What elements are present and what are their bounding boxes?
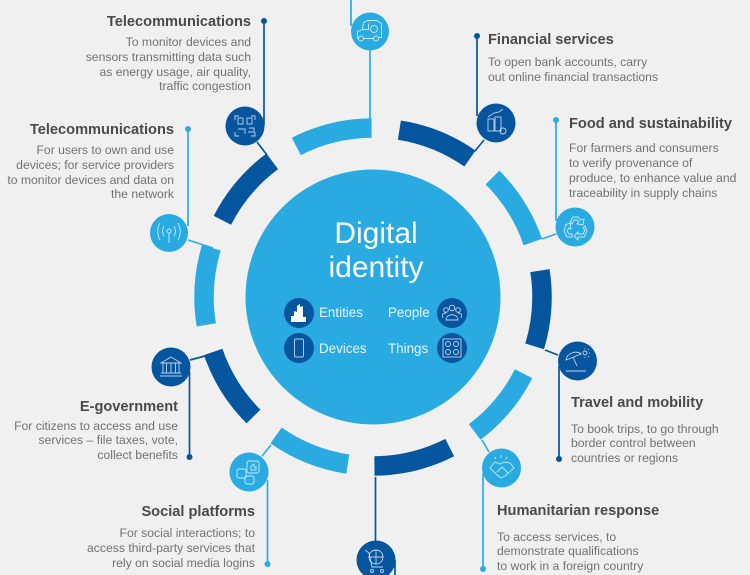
leader line xyxy=(262,445,271,564)
segmented ring xyxy=(204,128,542,466)
leader line xyxy=(376,477,395,575)
panel: financial services: out online financial transactions xyxy=(488,70,658,84)
heading: Telecommunications xyxy=(30,122,174,138)
panel: e-government: collect benefits xyxy=(97,448,178,462)
panel: travel and mobility xyxy=(545,342,719,465)
dot xyxy=(553,117,559,123)
panel: telecommunications devices xyxy=(86,14,267,155)
icon: government building xyxy=(152,348,190,386)
leader line xyxy=(475,36,484,151)
dot xyxy=(480,566,486,572)
panel: travel and mobility: countries or regions xyxy=(571,451,678,465)
icon: speech bubbles xyxy=(230,452,268,492)
heading: Telecommunications xyxy=(107,14,251,30)
panel: humanitarian response: demonstrate qualifications xyxy=(497,544,639,558)
label: things: Things xyxy=(388,341,428,356)
description: For citizens to access and use xyxy=(14,419,178,433)
panel: telecommunications users xyxy=(7,122,213,252)
panel: financial services xyxy=(474,32,658,151)
leader line xyxy=(257,21,267,155)
icon: people xyxy=(437,298,467,328)
panel: food and sustainability xyxy=(542,116,736,246)
dot xyxy=(185,126,191,132)
description: For farmers and consumers xyxy=(569,141,719,155)
icon: things xyxy=(437,333,467,363)
panel: e-government xyxy=(14,348,205,462)
panel: e-government: services – file taxes, vote, xyxy=(38,433,178,447)
heading: Financial services xyxy=(488,32,614,48)
dot xyxy=(264,561,270,567)
label: entities: Entities xyxy=(319,305,363,320)
description: To book trips, to go through xyxy=(571,422,719,436)
icon: ambulance xyxy=(351,12,389,50)
heading: E-government xyxy=(80,399,178,415)
icon: entities xyxy=(284,298,314,328)
description: To monitor devices and xyxy=(126,35,251,49)
leader line xyxy=(482,440,489,569)
leader line xyxy=(545,350,559,459)
icon: devices xyxy=(284,333,314,363)
icon: handshake xyxy=(482,448,521,488)
dot xyxy=(186,454,192,460)
label: people: People xyxy=(388,305,430,320)
icon: network grid xyxy=(226,106,264,146)
panel: humanitarian response: to work in a foreign country xyxy=(497,559,644,573)
central circle: digital identity xyxy=(246,170,500,424)
icon: antenna xyxy=(150,214,188,252)
icon: shopping cart xyxy=(356,540,396,575)
leader line xyxy=(542,120,556,239)
panel: social platforms: rely on social media logins xyxy=(112,556,255,570)
description: To access services, to xyxy=(497,530,616,544)
central circle: digital identity: identity xyxy=(328,251,424,284)
dot xyxy=(556,456,562,462)
panel: travel and mobility: border control between xyxy=(571,436,696,450)
panel: humanitarian response xyxy=(480,440,659,573)
title: Digital xyxy=(334,217,418,250)
panel: telecommunications users: devices; for service providers xyxy=(16,158,174,172)
panel: social platforms: access third-party services that xyxy=(87,541,256,555)
panel: telecommunications devices: traffic congestion xyxy=(159,79,251,93)
panel: telecommunications devices: as energy usage, air quality, xyxy=(99,65,251,79)
dot xyxy=(474,33,480,39)
heading: Social platforms xyxy=(141,504,255,520)
panel: food and sustainability: to verify provenance of xyxy=(569,156,693,170)
heading: Food and sustainability xyxy=(569,116,733,132)
leader line xyxy=(190,356,205,457)
panel: health (cropped) xyxy=(351,0,389,119)
leader line xyxy=(188,129,213,248)
dot xyxy=(261,18,267,24)
heading: Travel and mobility xyxy=(571,395,704,411)
icon: recycle xyxy=(556,208,594,246)
icon: beach umbrella xyxy=(558,342,597,380)
label: devices: Devices xyxy=(319,341,367,356)
description: For social interactions; to xyxy=(120,526,255,540)
heading: Humanitarian response xyxy=(497,503,659,519)
description: To open bank accounts, carry xyxy=(488,55,648,69)
icon: coins and chart xyxy=(476,104,516,142)
panel: telecommunications users: to monitor devices and data on xyxy=(7,173,174,187)
leader line xyxy=(351,0,370,119)
panel: telecommunications devices: sensors transmitting data such xyxy=(86,50,251,64)
panel: food and sustainability: traceability in supply chains xyxy=(569,186,717,200)
panel: e-commerce (cropped) xyxy=(356,477,396,575)
description: For users to own and use xyxy=(36,143,174,157)
panel: social platforms xyxy=(87,445,271,570)
panel: telecommunications users: the network xyxy=(111,187,175,201)
panel: food and sustainability: produce, to enhance value and xyxy=(569,171,736,185)
